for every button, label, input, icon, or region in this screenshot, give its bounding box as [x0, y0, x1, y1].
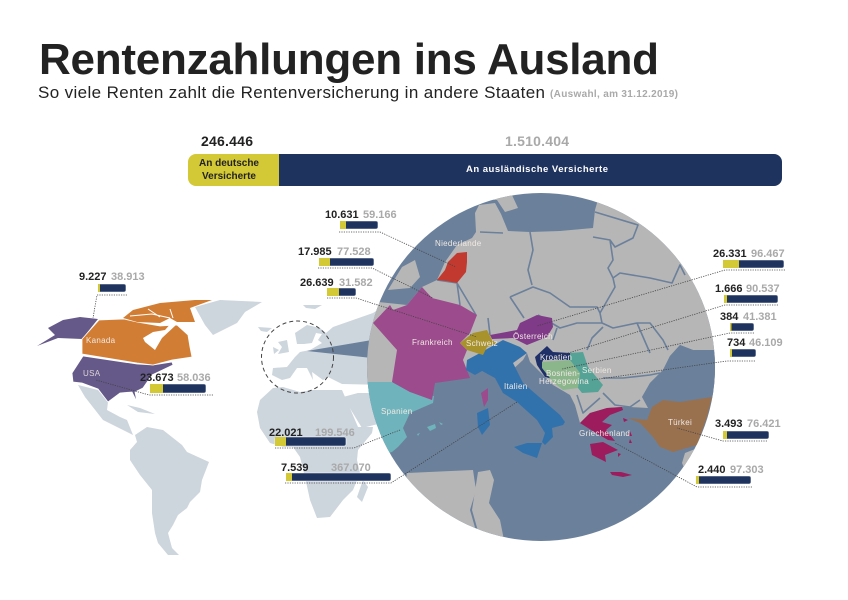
data: Kanada: 38.913	[111, 271, 145, 283]
arabia	[343, 393, 385, 428]
data: Spanien: 22.021	[269, 427, 303, 439]
leader lines	[93, 232, 785, 487]
hudson bay	[143, 322, 176, 350]
britain	[388, 260, 420, 290]
levant	[682, 450, 694, 466]
country labels: Türkei	[668, 418, 692, 427]
data: Bosnien-Herzegowina: 384	[720, 311, 739, 323]
data: Kroatien: 90.537	[746, 283, 780, 295]
yellow segment	[188, 154, 279, 186]
europe detail circle	[367, 193, 715, 541]
country labels: Spanien	[381, 407, 412, 416]
africa	[257, 387, 373, 518]
data: USA: 23.673	[140, 372, 174, 384]
funnel to detail circle	[307, 340, 372, 358]
country labels: Schweiz	[466, 339, 498, 348]
turkey	[628, 397, 712, 452]
canadian arctic islands	[123, 300, 212, 323]
total german value: 246.446	[201, 133, 253, 149]
switzerland	[460, 330, 497, 355]
data: Spanien	[269, 427, 355, 446]
data: Italien: 7.539	[281, 462, 309, 474]
country labels: Kroatien	[540, 353, 572, 362]
corsica	[481, 388, 488, 407]
country labels: Herzegowina	[539, 377, 589, 386]
austria	[490, 315, 553, 345]
canada mainland	[82, 319, 192, 365]
country labels: Frankreich	[412, 338, 453, 347]
data: Österreich	[713, 248, 785, 268]
data: Schweiz: 26.639	[300, 277, 334, 289]
country labels: Italien	[504, 382, 527, 391]
title: Rentenzahlungen ins Ausland	[39, 35, 659, 84]
data: Bosnien-Herzegowina	[720, 311, 777, 331]
balearic islands	[417, 422, 443, 436]
country labels: Serbien	[582, 366, 612, 375]
data: Kroatien: 1.666	[715, 283, 743, 295]
data: Frankreich	[298, 246, 374, 266]
sardinia	[477, 408, 490, 435]
country labels: Niederlande	[435, 239, 482, 248]
black sea	[642, 345, 715, 398]
island channels	[130, 309, 173, 318]
subtitle: So viele Renten zahlt die Rentenversicherung in andere Staaten	[38, 83, 545, 102]
data: Spanien: 199.546	[315, 427, 355, 439]
usa label: USA	[83, 369, 101, 378]
data: Niederlande	[325, 209, 397, 229]
sicily	[514, 443, 542, 458]
data: Serbien: 46.109	[749, 337, 783, 349]
data: Schweiz	[300, 277, 373, 296]
eurasia	[272, 305, 385, 385]
serbia	[570, 352, 603, 393]
data: USA	[140, 372, 211, 393]
data: Niederlande: 59.166	[363, 209, 397, 221]
data: Frankreich: 77.528	[337, 246, 371, 258]
data: Türkei: 76.421	[747, 418, 781, 430]
data: Italien	[281, 462, 391, 481]
navy segment label: An ausländische Versicherte	[466, 164, 608, 175]
data: Griechenland: 2.440	[698, 464, 726, 476]
country labels: Österreich	[513, 332, 553, 341]
canada label: Kanada	[86, 336, 116, 345]
data: USA: 58.036	[177, 372, 211, 384]
netherlands	[437, 252, 467, 283]
croatia	[535, 346, 570, 380]
scandinavia	[492, 196, 518, 212]
data: Niederlande: 10.631	[325, 209, 359, 221]
data: Griechenland: 97.303	[730, 464, 764, 476]
sea background	[360, 190, 725, 545]
data: Kanada	[79, 271, 145, 292]
svalbard	[303, 305, 322, 309]
canada	[82, 300, 212, 365]
tunisia and libya	[472, 470, 504, 537]
dashed locator circle	[262, 321, 334, 393]
data: Kroatien	[715, 283, 780, 303]
usa	[37, 317, 173, 402]
bosnia	[542, 360, 580, 390]
italy	[466, 340, 565, 445]
total bar	[188, 133, 782, 186]
data: Österreich: 96.467	[751, 248, 785, 260]
source note: (Auswahl, am 31.12.2019)	[550, 89, 678, 100]
madagascar	[357, 480, 368, 502]
data: Serbien	[727, 337, 783, 357]
ireland	[273, 347, 279, 354]
world map	[37, 300, 385, 555]
continental land	[367, 202, 714, 423]
alaska	[37, 317, 98, 346]
data: Kanada: 9.227	[79, 271, 107, 283]
land borders	[437, 212, 685, 413]
greenland	[195, 300, 262, 335]
data: Bosnien-Herzegowina: 41.381	[743, 311, 777, 323]
greece	[580, 407, 632, 477]
africa north coast	[406, 470, 476, 528]
data: Italien: 367.070	[331, 462, 371, 474]
data: Frankreich: 17.985	[298, 246, 332, 258]
cuba	[127, 405, 155, 414]
data: Serbien: 734	[727, 337, 746, 349]
mexico and central america	[78, 385, 133, 435]
country labels	[381, 239, 692, 438]
data: Türkei: 3.493	[715, 418, 743, 430]
iceland	[258, 327, 272, 332]
data: Schweiz: 31.582	[339, 277, 373, 289]
south america	[130, 427, 209, 555]
yellow segment label: An deutsche	[199, 158, 259, 169]
spain	[368, 382, 434, 452]
data: Türkei	[715, 418, 781, 439]
france	[373, 287, 477, 400]
contiguous usa	[72, 356, 173, 402]
total foreign value: 1.510.404	[505, 133, 569, 149]
britain	[278, 340, 289, 354]
country labels: Griechenland	[579, 429, 630, 438]
yellow segment label: Versicherte	[202, 171, 256, 182]
data: Österreich: 26.331	[713, 248, 747, 260]
navy segment	[279, 154, 782, 186]
country labels: Bosnien-	[546, 369, 580, 378]
data: Griechenland	[696, 464, 764, 484]
